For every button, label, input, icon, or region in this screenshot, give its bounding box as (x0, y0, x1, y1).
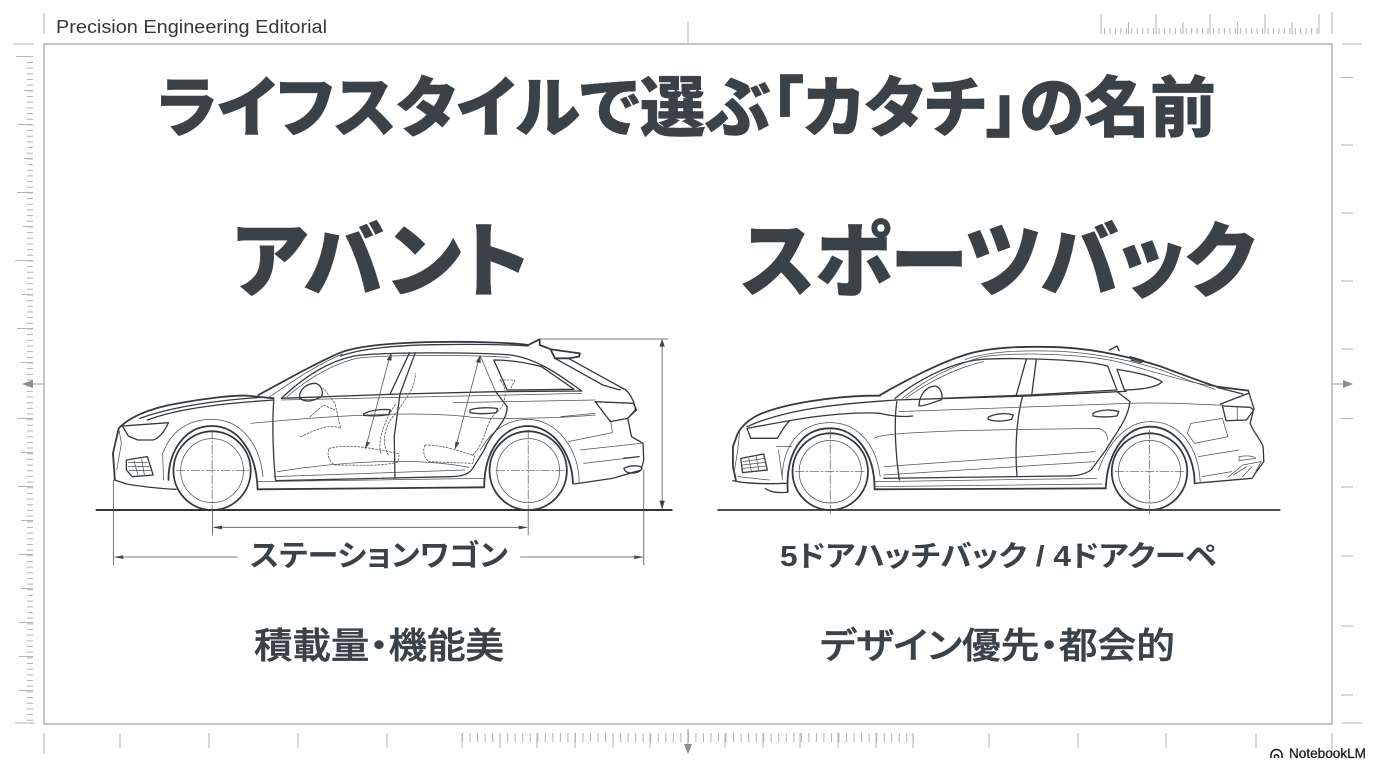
arrow: right centre mark (1332, 380, 1353, 388)
NotebookLM wordmark: NotebookLM (1289, 746, 1366, 761)
header label: Precision Engineering Editorial (56, 17, 327, 37)
trait: Avant: 積載量・機能美 (254, 625, 504, 666)
windows (270, 353, 582, 400)
body outline (733, 346, 1264, 493)
dimension lines (113, 339, 668, 565)
mirror, lights (734, 386, 1261, 480)
dashed seats (300, 373, 515, 465)
label: station wagon: ステーションワゴン (250, 539, 508, 573)
arrow: left centre mark (22, 380, 44, 388)
trait: Sportback: デザイン優先・都会的 (820, 625, 1175, 666)
icon: NotebookLM logo (1271, 750, 1282, 758)
heading: Avant: アバント (232, 217, 529, 308)
doors and body lines (251, 392, 641, 481)
wheels (173, 430, 567, 510)
arrow: bottom centre mark (684, 729, 692, 754)
body outline (113, 339, 644, 489)
windows (895, 354, 1217, 400)
title: ライフスタイルで選ぶ「カタチ」の名前 (157, 71, 1216, 145)
illustration: Avant station wagon side view (97, 339, 672, 565)
heading: Sportback: スポーツバック (741, 217, 1255, 308)
doors and body lines (875, 392, 1239, 480)
ground line (718, 509, 1280, 511)
label: 5-door hatchback / 4-door coupe: 5ドアハッチバック / 4ドアクーペ (780, 541, 1217, 573)
mirror, lights (117, 383, 642, 477)
illustration: Sportback side view (718, 346, 1280, 515)
ground line (97, 509, 672, 511)
wheels (793, 430, 1187, 515)
